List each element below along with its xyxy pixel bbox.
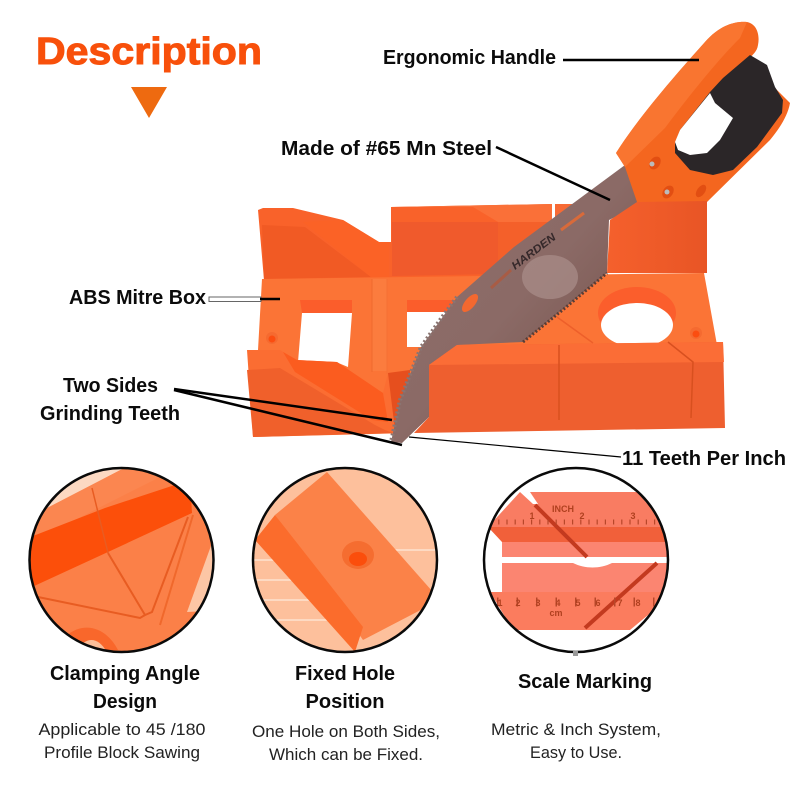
back wall right [607, 201, 707, 273]
round hole [598, 287, 676, 339]
caption: scale marking: Scale Marking [518, 671, 652, 693]
circle: scale marking detail: 1 [529, 511, 535, 521]
label: steel: Made of #65 Mn Steel [281, 138, 492, 160]
saw blade [391, 165, 640, 443]
front wall left [247, 350, 410, 437]
caption: fixed hole: One Hole on Both Sides, [252, 723, 440, 741]
circle: scale marking detail: 3 [535, 598, 541, 608]
blade logo: HARDEN [510, 231, 559, 272]
floor slot [557, 317, 593, 343]
caption: clamping angle [38, 663, 206, 762]
window left [300, 300, 352, 313]
caption: fixed hole: Which can be Fixed. [269, 746, 423, 764]
circle: scale marking detail: 5 [575, 598, 581, 608]
caption: scale marking [491, 671, 661, 762]
mitre box [247, 204, 717, 437]
caption: scale marking: Easy to Use. [530, 744, 622, 762]
circle: scale marking detail: cm [549, 608, 563, 618]
circle: scale marking detail: 6 [595, 598, 601, 608]
caption: fixed hole: Fixed Hole [295, 663, 395, 685]
front wall right [414, 342, 725, 433]
label: ergonomic handle: Ergonomic Handle [383, 47, 556, 69]
saw handle [616, 22, 790, 202]
rivets [647, 154, 663, 172]
circle: scale marking detail: INCH [552, 504, 574, 514]
label: grinding teeth: Grinding Teeth [40, 403, 180, 425]
caption: fixed hole: Position [306, 691, 384, 713]
label: grinding teeth: Two Sides [63, 375, 158, 397]
rulers [498, 520, 656, 524]
circle: scale marking detail: 2 [515, 598, 521, 608]
circle: scale marking detail: 2 [579, 511, 585, 521]
black grip [675, 55, 783, 175]
circle: scale marking detail: 8 [635, 598, 641, 608]
icon: down triangle [131, 87, 167, 118]
label: ABS mitre box: ABS Mitre Box [69, 287, 206, 309]
window middle [407, 300, 455, 312]
circle: fixed hole detail [250, 465, 445, 655]
caption: clamping angle: Clamping Angle [50, 663, 200, 685]
circle: scale marking detail: 4 [555, 598, 561, 608]
label: grinding teeth [40, 375, 402, 445]
handle hole [675, 93, 733, 155]
circle: scale marking detail: 1 [497, 598, 503, 608]
caption: fixed hole [252, 663, 440, 764]
label: steel [281, 138, 610, 200]
label: teeth per inch [409, 437, 786, 470]
title: Description [36, 31, 262, 73]
circle: scale marking detail [480, 465, 675, 656]
handle orange body [616, 22, 790, 202]
caption: clamping angle: Applicable to 45 /180 [38, 721, 206, 739]
caption: clamping angle: Profile Block Sawing [44, 744, 200, 762]
label: ABS mitre box [69, 287, 280, 309]
mitre box front [414, 201, 725, 433]
caption: clamping angle: Design [93, 691, 157, 713]
floor [258, 273, 717, 400]
mount holes [266, 332, 278, 344]
back wall left [258, 204, 552, 280]
circle: scale marking detail: 7 [617, 598, 623, 608]
circle: scale marking detail: 3 [630, 511, 636, 521]
label: teeth per inch: 11 Teeth Per Inch [622, 448, 786, 470]
caption: scale marking: Metric & Inch System, [491, 721, 661, 739]
circle: clamping angle detail [25, 465, 225, 655]
